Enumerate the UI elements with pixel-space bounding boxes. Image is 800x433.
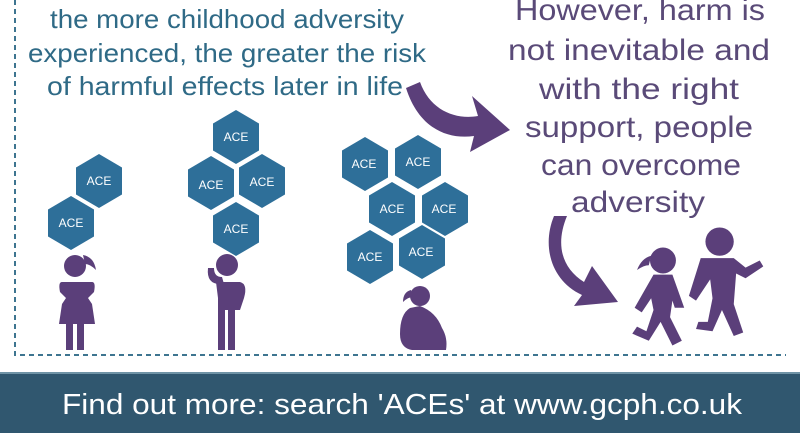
left statement text: experienced, the greater the risk: [28, 38, 427, 68]
right statement text: adversity: [571, 186, 705, 219]
arrow: down to runners: [549, 216, 618, 306]
right statement text: support, people: [525, 111, 753, 144]
hexagons: group 2: ACE: [224, 222, 248, 236]
hexagons: group 3: ACE: [406, 155, 430, 169]
hexagons: group 3: [342, 135, 468, 284]
figure: thinking person: [208, 254, 245, 350]
figure: running children: [632, 227, 763, 345]
footer bar: [0, 372, 800, 433]
hexagons: group 2: ACE: [250, 175, 274, 189]
hexagons: group 3: ACE: [432, 202, 456, 216]
arrow: to right text: [406, 82, 510, 152]
hexagons: group 3: ACE: [409, 245, 433, 259]
hexagons: group 1: [48, 154, 122, 250]
hexagons: group 3: ACE: [352, 157, 376, 171]
right statement text: [508, 0, 770, 219]
hexagons: group 2: [188, 110, 285, 256]
right statement text: with the right: [538, 73, 740, 106]
right statement text: not inevitable and: [508, 34, 770, 67]
right statement text: can overcome: [541, 149, 741, 182]
hexagons: group 1: ACE: [87, 174, 111, 188]
hexagons: group 1: ACE: [59, 216, 83, 230]
left statement text: of harmful effects later in life: [47, 71, 403, 101]
footer text: Find out more: search 'ACEs' at www.gcph.co.uk: [62, 389, 743, 421]
hexagons: group 3: ACE: [358, 250, 382, 264]
left statement text: the more childhood adversity: [50, 4, 404, 34]
hexagons: group 3: ACE: [380, 202, 404, 216]
hexagons: group 2: ACE: [224, 130, 248, 144]
dashed frame: [15, 0, 786, 355]
hexagons: group 2: ACE: [199, 178, 223, 192]
figure: crouching child: [400, 286, 446, 350]
figure: girl standing: [58, 255, 96, 350]
left statement text: [28, 4, 427, 101]
